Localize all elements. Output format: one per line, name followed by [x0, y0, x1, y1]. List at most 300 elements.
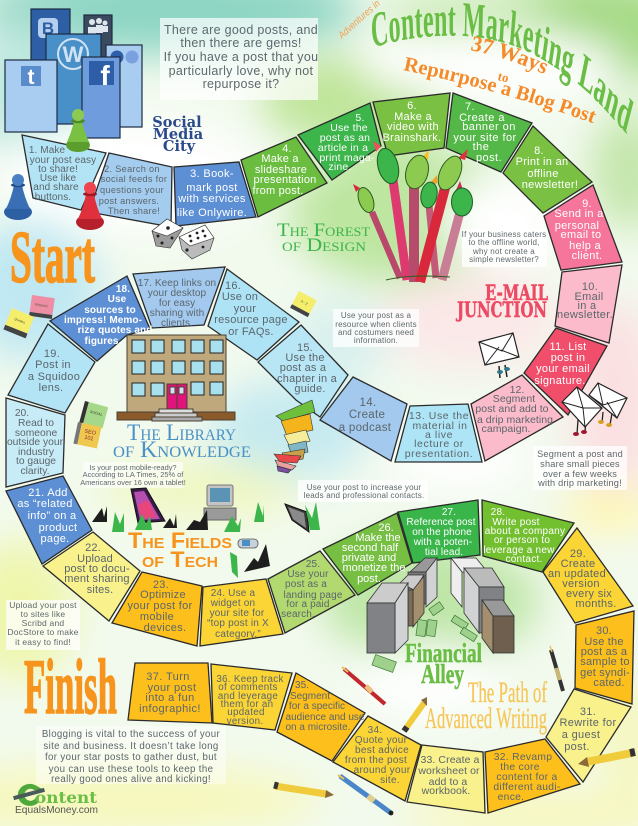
intro text box: particularly love, why not: [169, 64, 314, 78]
tile 20: industry: [18, 447, 55, 458]
icon: black pen: [550, 646, 563, 691]
tile 11: signature.: [534, 375, 586, 387]
heading: The Path of Advanced Writing: [425, 676, 547, 735]
tile 2: Then share!: [108, 206, 160, 216]
tile 18: Use: [108, 294, 127, 305]
tile 10: in a: [578, 300, 597, 312]
tile 19: [8, 324, 95, 413]
note: drip marketing: [533, 446, 627, 490]
icon: yellow book right: [290, 291, 317, 317]
tile 1: and share: [33, 182, 79, 193]
tile 18: sources to: [84, 305, 136, 316]
tile 22: post to docu-: [64, 563, 130, 575]
tile 34: site.: [380, 775, 400, 786]
tile 1: [22, 135, 106, 210]
tile 33: worksheet or: [417, 765, 480, 777]
note: upload: it easy to find!: [15, 637, 71, 647]
tile 6: Make a: [394, 111, 433, 123]
tile 37: [128, 663, 212, 723]
heading: The Library of Knowledge: of Knowledge: [113, 437, 251, 462]
note: resource: resource when clients: [335, 320, 417, 329]
tile 7: banner on: [462, 121, 516, 133]
heading: Start: Start: [10, 217, 95, 299]
note: offline newsletter: [462, 229, 547, 267]
tile 5: post as an: [320, 132, 370, 144]
tile 4: from post.: [253, 185, 303, 197]
tile 37: your post: [148, 682, 196, 694]
tile 13: lecture or: [414, 438, 464, 450]
title: 37 Ways: 37 Ways: [471, 36, 548, 74]
note: offline newsletter: If your business caters: [462, 230, 546, 239]
tile 26: second half: [342, 542, 399, 554]
tile 8: Print in an: [516, 156, 568, 168]
tile 35: audience and use: [286, 712, 365, 723]
note: resource: and costumers need: [338, 328, 414, 337]
tile 32: ence.: [498, 792, 524, 803]
icon: money bills: [372, 602, 477, 672]
tile 30: Use the: [584, 636, 624, 648]
icon: yellow book: Quotes: [14, 317, 26, 325]
tile 25: [268, 551, 355, 633]
tile 34: around your: [354, 765, 411, 776]
tile 26: monetize the: [343, 562, 405, 574]
tile 16: 16.: [225, 280, 241, 292]
tile 20: someone: [15, 428, 57, 439]
icon: book stack: [274, 400, 315, 473]
tile 27: 27.: [442, 507, 456, 518]
tile 31: Rewrite for: [559, 717, 617, 729]
tile 22: sites.: [87, 584, 113, 596]
tile 33: [407, 745, 485, 813]
heading: Financial Alley: Financial: [405, 638, 482, 668]
closing paragraph: [36, 726, 226, 785]
tile 26: 26.: [378, 522, 394, 534]
heading: The Fields of Tech: [128, 528, 232, 572]
tile 6: video with: [387, 121, 439, 133]
tile 32: [485, 739, 580, 813]
heading: E-Mail Junction: [456, 280, 548, 322]
icon: yellow book: [3, 308, 34, 338]
tile 25: for a paid: [286, 599, 330, 610]
tile 15: post as a: [280, 362, 327, 374]
tile 16: Use on: [222, 291, 258, 303]
heading: E-Mail Junction: JUNCTION: [456, 297, 547, 322]
tile 6: 6.: [407, 100, 417, 112]
tile 34: Quote your: [355, 735, 408, 746]
tile 21: page.: [40, 533, 70, 545]
heading: Social Media City: City: [163, 138, 196, 155]
heading: Social Media City: Social: [152, 114, 202, 131]
tile 4: presentation: [254, 174, 316, 186]
tile 32: content for a: [496, 772, 558, 783]
tile 17: for easy: [159, 298, 195, 309]
tile 28: or person to: [494, 535, 550, 546]
tile 10: newsletter.: [557, 309, 613, 321]
tile 12: [471, 375, 563, 461]
tile 12: 12.: [510, 384, 524, 396]
heading: Social Media City: [152, 114, 204, 155]
tile 32: the core: [500, 762, 540, 773]
logo: Content Equals Money: [13, 784, 98, 816]
tile 8: [503, 126, 592, 213]
tile 36: version.: [227, 716, 263, 727]
tile 30: get syndi-: [580, 667, 630, 679]
tile 6: Brainshark.: [383, 132, 441, 144]
tile 15: 15.: [297, 342, 313, 354]
icon: grass tufts: [92, 502, 320, 578]
closing paragraph: site and business. It doesn’t take long: [43, 741, 219, 752]
tile 25: Use your: [287, 569, 329, 580]
icon: pencil bottom: [274, 785, 334, 798]
tile 5: zine.: [328, 161, 352, 173]
tile 19: Post in: [35, 359, 71, 371]
tile 21: as “related: [17, 498, 73, 510]
tile 20: outside your: [7, 437, 64, 448]
tile 37: infographic!: [139, 703, 201, 715]
tile 1: 1. Make: [29, 145, 65, 156]
icon: SEO 101 book: SEO: [84, 429, 97, 437]
icon: red pen: [342, 667, 385, 704]
note: drip marketing: Segment a post and: [537, 449, 623, 459]
tile 20: Read to: [18, 418, 54, 429]
tile 4: 4.: [282, 143, 292, 155]
tile 13: a live: [425, 429, 453, 441]
tile 4: [241, 137, 327, 217]
tile 35: on a microsite.: [285, 722, 351, 733]
icon: green pawn: [66, 109, 90, 152]
tile 36: 36. Keep track: [216, 674, 284, 685]
tile 26: private and: [342, 552, 396, 564]
tile 1: buttons.: [35, 192, 71, 203]
icon: blue pen: [338, 775, 393, 815]
tile 21: product: [39, 522, 77, 534]
heading: The Forest of Design: The Forest: [277, 220, 370, 241]
tile 24: category.”: [215, 629, 261, 640]
note: mobile ready: According to LA Times, 25% of: [83, 470, 184, 479]
tile 2: questions your: [100, 185, 164, 195]
tile 5: Use the: [330, 122, 368, 134]
tile 18: 18.: [116, 284, 130, 295]
tile 7: [446, 93, 532, 172]
tile 3: like Onlywire.: [177, 207, 247, 219]
tile 14: 14.: [360, 397, 376, 409]
tile 28: leverage a new: [483, 545, 555, 556]
icon: handheld device: [238, 539, 258, 548]
tile 28: Write post: [492, 517, 540, 528]
tile 7: 7.: [465, 101, 475, 113]
icon: desktop computer: [204, 485, 236, 520]
tile 8: newsletter!: [522, 179, 578, 191]
tile 11: post in: [551, 352, 585, 364]
tile 29: Create: [561, 558, 595, 570]
tile 32: 32. Revamp: [494, 752, 552, 763]
icon: green book: SOCIAL: [89, 410, 103, 417]
closing paragraph: you can use these tools to keep the: [49, 764, 213, 775]
note: upload: to sites like: [21, 609, 65, 619]
note: professional contacts: Use your post to increase your: [307, 483, 421, 492]
tile 15: [258, 325, 348, 417]
tile 31: [546, 689, 631, 782]
icon: SEO 101 book: 101: [84, 435, 94, 442]
tile 1: your post easy: [30, 155, 96, 166]
tile 3: [174, 162, 256, 226]
tile 14: Create: [349, 409, 385, 421]
heading: E-Mail Junction: E-MAIL: [485, 280, 548, 305]
tile 20: clarity.: [20, 466, 50, 477]
heading: The Fields of Tech: of Tech: [142, 547, 218, 572]
icon: big pencil right: [578, 752, 635, 767]
tile 5: article in a: [318, 142, 368, 154]
logo: Content Equals Money: EqualsMoney.com: [15, 804, 98, 816]
heading: The Path of Advanced Writing: The Path of: [468, 676, 547, 709]
note: offline newsletter: simple newsletter?: [469, 255, 539, 264]
tile 35: [277, 673, 365, 761]
tile 5: print maga-: [319, 152, 375, 164]
tile 3: with services: [177, 193, 246, 205]
icon: social media cards: [5, 9, 142, 138]
note: upload: [6, 600, 80, 650]
tile 17: [133, 267, 225, 329]
tile 30: [575, 611, 634, 704]
tile 25: 25.: [306, 559, 320, 570]
tile 2: [89, 153, 172, 227]
note: mobile ready: Is your post mobile-ready?: [89, 463, 177, 472]
heading: The Library of Knowledge: [113, 420, 251, 462]
icon: social media cards: t: [28, 66, 34, 89]
tile 11: your email: [536, 363, 590, 375]
note: mobile ready: Americans over 16 own a tablet!: [80, 478, 186, 487]
tile 29: an updated: [548, 568, 606, 580]
icon: green book: [79, 401, 108, 428]
tile 37: 37. Turn: [146, 671, 190, 683]
tile 26: post.: [357, 573, 381, 585]
tile 9: 9.: [582, 198, 592, 210]
heading: Social Media City: Media: [153, 126, 204, 143]
closing paragraph: Blogging is vital to the success of your: [42, 729, 221, 740]
note: professional contacts: [298, 480, 428, 502]
tile 23: [112, 572, 202, 646]
tile 1: to share!: [38, 164, 78, 175]
tile 33: add to a: [429, 776, 467, 788]
icon: yellow book right: A - Z: [300, 299, 309, 307]
tile 2: 2. Search on: [104, 164, 160, 174]
tile 21: info” on a: [28, 510, 77, 522]
tile 13: [395, 404, 482, 462]
tile 28: contact.: [505, 554, 543, 565]
tile 29: version: [562, 578, 600, 590]
heading: Financial Alley: [405, 638, 482, 689]
icon: pink book: Rhetoric: [35, 303, 49, 308]
tile 21: [6, 476, 92, 564]
tile 13: presentation.: [405, 448, 473, 460]
tile 29: [543, 528, 633, 623]
tile 27: with a poten-: [413, 537, 472, 548]
tile 34: best advice: [355, 745, 409, 756]
tile 28: 28.: [491, 507, 505, 518]
icon: blue pawn: [4, 174, 32, 220]
intro text box: repurpose it?: [203, 77, 279, 91]
tile 25: post as a: [285, 579, 327, 590]
heading: The Fields of Tech: The Fields: [128, 528, 232, 553]
icon: finance buildings: [367, 558, 514, 653]
tile 26: Make the: [355, 532, 401, 544]
tile 24: 24. Use a: [211, 588, 256, 599]
tile 4: slideshare: [255, 164, 307, 176]
tile 23: devices.: [144, 622, 186, 634]
icon: social media cards: B: [42, 19, 54, 38]
tile 17: 17. Keep links on: [138, 278, 216, 289]
tile 34: [333, 716, 421, 801]
note: resource: [333, 309, 419, 347]
tile 21: 21. Add: [28, 487, 68, 499]
tile 22: 22.: [85, 542, 101, 554]
tile 23: Optimize: [140, 589, 186, 601]
note: professional contacts: leads and professional contacts.: [304, 491, 424, 500]
tile 36: them for an: [221, 699, 273, 710]
tile 24: “top post in X: [207, 618, 269, 629]
tile 14: a podcast: [339, 422, 392, 434]
tile 33: 33. Create a: [420, 754, 480, 766]
intro text box: then there are gems!: [180, 36, 302, 50]
icon: red pawn: [76, 182, 104, 230]
tile 35: 35.: [295, 680, 309, 691]
tile 35: for a specific: [289, 701, 345, 712]
tile 34: 34.: [368, 725, 382, 736]
tile 4: Make a: [261, 153, 299, 165]
tile 13: material in: [412, 420, 468, 432]
tile 8: offline: [527, 168, 559, 180]
tile 25: landing page: [283, 590, 343, 601]
tile 23: mobile: [140, 611, 174, 623]
tile 30: 30.: [596, 625, 612, 637]
tile 27: Reference post: [406, 517, 476, 528]
tile 3: 3. Book-: [190, 168, 234, 180]
tile 27: [398, 500, 480, 563]
tile 20: 20.: [15, 408, 29, 419]
tile 22: [43, 532, 140, 621]
tile 28: about a company: [485, 526, 565, 537]
tile 36: of comments: [218, 682, 278, 693]
tile 7: Create a: [459, 112, 505, 124]
intro text box: [160, 18, 318, 100]
tile 5: [298, 103, 381, 180]
title: to: to: [496, 68, 510, 86]
tile 9: Send in a: [554, 208, 604, 220]
icon: dice: [152, 219, 214, 259]
icon: social media cards: W: [63, 42, 84, 67]
note: drip marketing: with drip marketing!: [537, 478, 622, 488]
tile 18: [50, 276, 152, 361]
tile 20: to gauge: [16, 456, 56, 467]
tile 22: Upload: [77, 553, 113, 565]
tile 10: 10.: [582, 281, 598, 293]
closing paragraph: really good ones alive and kicking!: [51, 774, 211, 785]
tile 31: 31.: [580, 706, 596, 718]
note: drip marketing: over a few weeks: [543, 469, 617, 479]
tile 15: Use the: [285, 352, 325, 364]
tile 36: and leverage: [218, 691, 278, 702]
tile 35: Segment: [290, 691, 330, 702]
tile 3: mark post: [186, 182, 238, 194]
tile 9: help a: [569, 240, 601, 252]
tile 17: sharing with: [150, 308, 204, 319]
tile 24: your site for: [210, 608, 265, 619]
heading: Financial Alley: Alley: [421, 659, 464, 689]
tile 18: rize quotes and: [78, 325, 152, 336]
tile 9: personal: [555, 220, 599, 232]
tile 12: a drip marketing: [477, 414, 553, 426]
tile 19: 19.: [44, 348, 60, 360]
tile 1: Use like: [40, 173, 77, 184]
tile 30: sample to: [580, 656, 630, 668]
tile 26: [323, 513, 412, 595]
tile 23: 23.: [153, 579, 169, 591]
tile 20: [6, 398, 65, 487]
tile 6: [373, 93, 450, 156]
tile 9: email to: [561, 229, 601, 241]
tile 13: 13. Use the: [409, 410, 469, 422]
note: offline newsletter: to the offline world,: [468, 238, 540, 247]
tile 30: post as a: [581, 646, 628, 658]
tile 31: post.: [564, 741, 590, 753]
tile 7: the: [473, 141, 489, 153]
tile 29: every six: [566, 588, 612, 600]
closing paragraph: for your star posts to gather dust, but: [45, 752, 217, 763]
tile 7: post.: [476, 152, 502, 164]
tile 12: post and add to: [475, 403, 549, 415]
tile 10: Email: [574, 291, 604, 303]
tile 19: a Squidoo: [28, 371, 80, 383]
note: resource: information.: [354, 336, 398, 345]
icon: pair of envelopes: [562, 383, 627, 436]
note: upload: Scribd and: [22, 618, 64, 628]
heading: The Forest of Design: of Design: [282, 235, 367, 256]
tile 15: guide.: [294, 383, 326, 395]
tile 25: search.: [281, 609, 315, 620]
tile 12: campaign.: [482, 423, 530, 435]
tile 32: different audi-: [493, 782, 561, 793]
icon: yellow pencil: [404, 697, 427, 731]
tile 31: a guest: [562, 729, 600, 741]
tile 37: into a fun: [145, 692, 195, 704]
tile 29: months.: [575, 598, 617, 610]
tile 14: [320, 377, 407, 461]
note: offline newsletter: why not create a: [472, 247, 535, 256]
tile 33: workbook.: [421, 785, 470, 797]
title: Repurpose a Blog Post: Repurpose a Blog Post: [404, 57, 596, 123]
tile 30: cated.: [593, 677, 625, 689]
icon: SEO 101 book: [73, 422, 101, 449]
tile 8: 8.: [534, 145, 544, 157]
tile 16: your: [234, 303, 256, 315]
tile 22: ment sharing: [64, 573, 130, 585]
tile 18: figures.: [85, 336, 122, 347]
tile 18: impress! Memo-: [64, 315, 142, 326]
tile 36: updated: [227, 707, 265, 718]
tile 24: widget on: [210, 598, 255, 609]
note: mobile ready: [80, 462, 186, 488]
tile 36: [211, 664, 292, 730]
icon: social media cards: f: [100, 60, 110, 91]
icon: laptop: [285, 504, 309, 532]
tile 10: [555, 265, 622, 343]
tile 7: your site for: [453, 132, 517, 144]
tile 34: from the post: [345, 755, 407, 766]
logo: Content Equals Money: ontent: [35, 788, 98, 807]
heading: The Forest of Design: [277, 220, 370, 256]
tile 16: or FAQs.: [228, 326, 274, 338]
tile 2: social feeds for: [101, 174, 167, 184]
